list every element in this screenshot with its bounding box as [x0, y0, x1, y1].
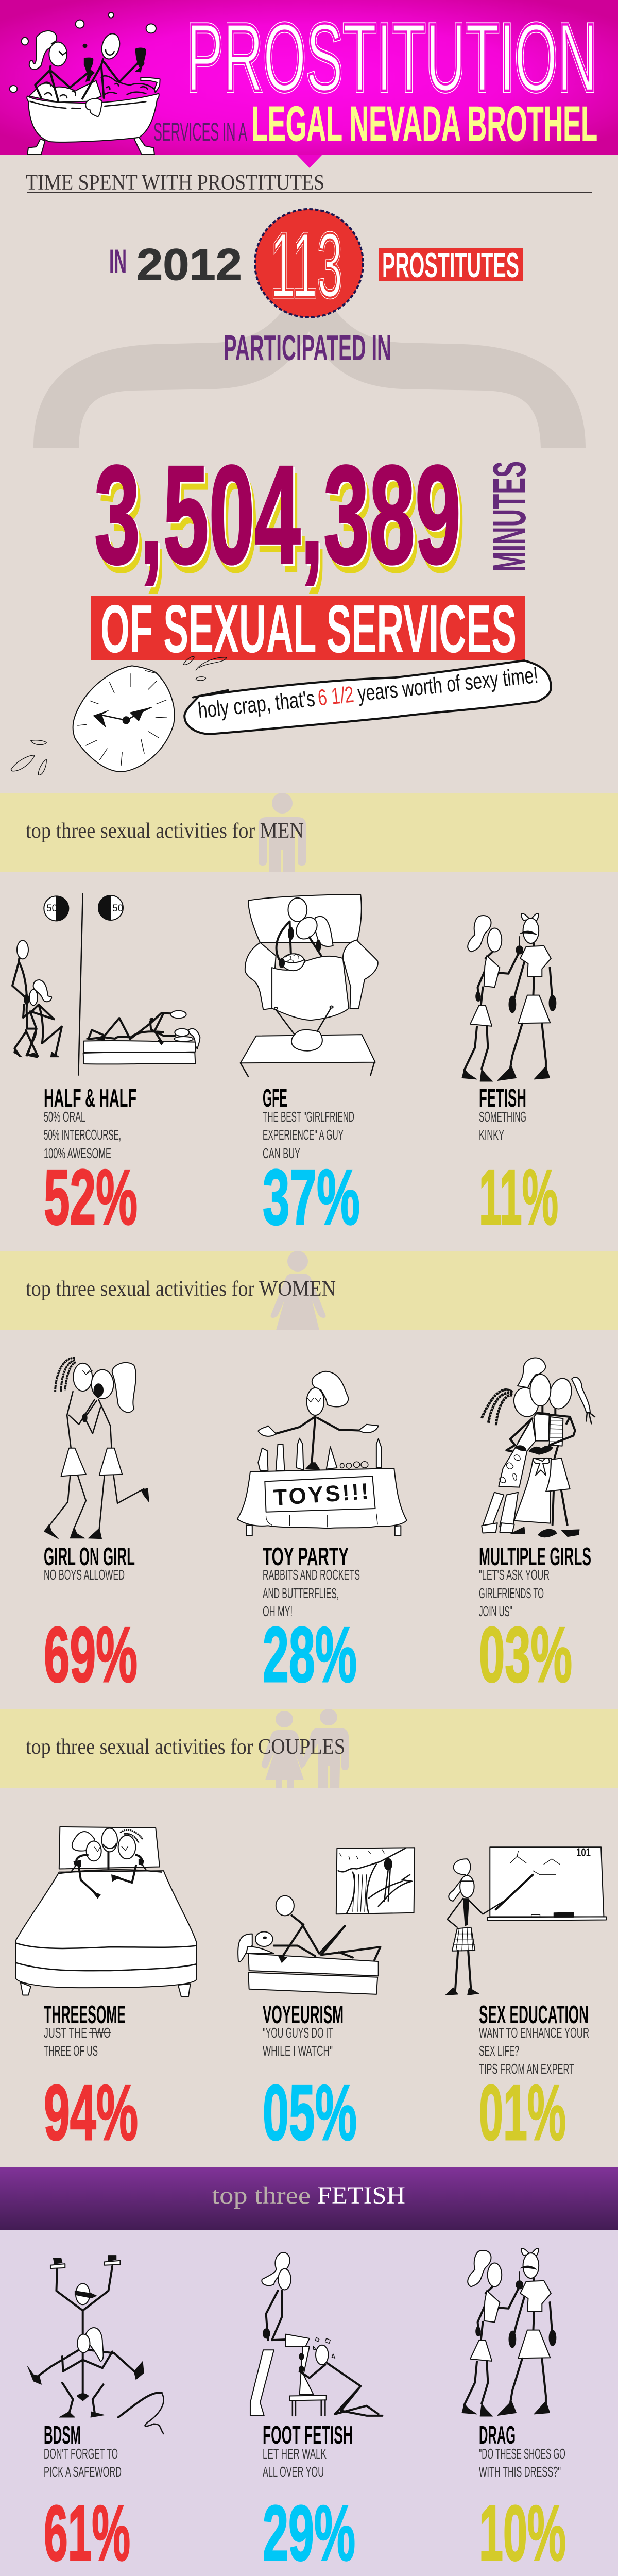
item: voyeurism	[238, 1848, 415, 2157]
item description: OH MY!	[263, 1603, 293, 1619]
percentage: 37%	[263, 1154, 360, 1241]
panel: top three for men	[12, 894, 558, 1241]
subtitle small: SERVICES IN A	[153, 117, 247, 146]
item title: TOY PARTY	[263, 1543, 349, 1571]
item: threesome	[16, 1827, 196, 2157]
percentage: 05%	[263, 2069, 357, 2157]
illustration: two girls kissing	[44, 1358, 149, 1539]
percentage: 29%	[263, 2489, 355, 2576]
band: fetish	[0, 2167, 618, 2230]
item description: CAN BUY	[263, 1145, 300, 1161]
badge: 113: 113	[270, 214, 342, 316]
illustration: teacher at whiteboard	[445, 1847, 606, 1995]
item: multiple girls	[479, 1358, 595, 1699]
item description: RABBITS AND ROCKETS	[263, 1567, 360, 1583]
heading: time spent	[26, 171, 592, 195]
item description: 50% ORAL	[44, 1109, 85, 1125]
big number: minutes	[94, 436, 465, 601]
decorative curly bracket	[33, 309, 586, 448]
item description: SOMETHING	[479, 1109, 526, 1125]
item: half and half	[12, 894, 200, 1241]
icon: man silhouette	[259, 793, 306, 872]
item description: 100% AWESOME	[44, 1145, 111, 1161]
item: drag: DRAG	[479, 2421, 516, 2449]
item description: LET HER WALK	[263, 2446, 327, 2462]
item description: "LET'S ASK YOUR	[479, 1567, 550, 1583]
item description	[263, 2446, 327, 2480]
item: bdsm: BDSM	[44, 2421, 81, 2449]
item description	[479, 1109, 526, 1143]
item description: NO BOYS ALLOWED	[44, 1567, 125, 1583]
item title: FETISH	[479, 1084, 526, 1112]
item: bdsm	[28, 2256, 164, 2576]
band title: top three sexual activities for MEN	[26, 819, 304, 843]
band: women	[0, 1251, 618, 1330]
percentage: 52%	[44, 1154, 138, 1241]
item description: KINKY	[479, 1127, 504, 1143]
item title: FOOT FETISH	[263, 2421, 353, 2449]
panel: header	[0, 0, 618, 168]
panel: top three for women	[44, 1358, 595, 1699]
item description	[263, 1567, 360, 1619]
callout: holy crap speech bubble: 6 1/2	[317, 682, 355, 710]
item: drag	[462, 2248, 566, 2576]
board text: 101: 101	[576, 1846, 591, 1859]
band: fetish: FETISH	[317, 2182, 405, 2209]
item title: VOYEURISM	[263, 2001, 344, 2029]
item description: 50% INTERCOURSE,	[44, 1127, 121, 1143]
item: girl on girl	[44, 1358, 149, 1699]
item title: HALF & HALF	[44, 1084, 136, 1112]
illustration: couple on armchair	[241, 894, 378, 1077]
item description	[479, 2025, 589, 2077]
item description: "YOU GUYS DO IT	[263, 2025, 333, 2041]
text: minutes: MINUTES	[484, 461, 536, 572]
item description: JUST THE TWO	[44, 2025, 111, 2041]
band: fetish: top three	[212, 2182, 311, 2209]
callout: holy crap speech bubble: holy crap, that's	[197, 686, 316, 723]
item description: PICK A SAFEWORD	[44, 2464, 122, 2480]
item description: THREE OF US	[44, 2043, 98, 2059]
big number: zero percent	[273, 2557, 616, 2576]
pointer under header	[297, 155, 322, 168]
percentage: 61%	[44, 2489, 130, 2576]
illustration: voyeur couple and picture	[238, 1848, 415, 1994]
item: toy party	[237, 1371, 407, 1699]
item description: THE BEST "GIRLFRIEND	[263, 1109, 354, 1125]
item title: THREESOME	[44, 2001, 126, 2029]
item description: WHILE I WATCH"	[263, 2043, 333, 2059]
callout: holy crap speech bubble	[184, 660, 551, 734]
item description: GIRLFRIENDS TO	[479, 1585, 544, 1601]
illustration: half and half	[12, 894, 200, 1075]
pie label: left 50: 50	[46, 903, 57, 914]
icon: melting clock	[11, 656, 227, 775]
illustration: three in a bed	[16, 1827, 196, 1997]
item description	[479, 1567, 550, 1619]
band title: top three sexual activities for COUPLES	[26, 1735, 345, 1759]
item description	[263, 1109, 354, 1161]
item description	[263, 2025, 333, 2059]
item: gfe	[241, 894, 378, 1241]
percentage: 69%	[44, 1611, 138, 1699]
panel: top three fetish	[0, 2167, 618, 2576]
illustration: toy party table	[237, 1371, 407, 1536]
item description: ALL OVER YOU	[263, 2464, 324, 2480]
item description: JOIN US"	[479, 1603, 512, 1619]
panel: zero percent conclusion	[0, 2557, 618, 2576]
item description	[479, 2446, 565, 2480]
illustration: couple in bathtub	[10, 12, 160, 155]
item: gfe: GFE	[263, 1084, 287, 1112]
label: prostitutes	[379, 246, 523, 285]
item description: EXPERIENCE" A GUY	[263, 1127, 344, 1143]
badge: 113	[255, 209, 363, 317]
item description: WITH THIS DRESS?"	[479, 2464, 561, 2480]
item description	[44, 2446, 122, 2480]
icon: woman silhouette	[271, 1251, 325, 1330]
item: sex education	[445, 1846, 606, 2157]
item description: SEX LIFE?	[479, 2043, 519, 2059]
item description: DON'T FORGET TO	[44, 2446, 118, 2462]
panel: top three for couples	[16, 1827, 606, 2157]
illustration: three girls	[482, 1358, 595, 1527]
text: participated in: PARTICIPATED IN	[224, 328, 391, 368]
badge: 113: 113	[270, 214, 342, 316]
illustration: bdsm figures	[28, 2256, 164, 2434]
percentage: 94%	[44, 2069, 138, 2157]
band: couples	[0, 1709, 618, 1788]
percentage: 28%	[263, 1611, 357, 1699]
callout: holy crap speech bubble: years worth of sexy time!	[356, 663, 539, 706]
illustration: foot fetish figures	[250, 2252, 382, 2416]
statement: in 2012: IN	[109, 242, 127, 280]
band: men	[0, 793, 618, 872]
item description: AND BUTTERFLIES,	[263, 1585, 339, 1601]
item: fetish	[462, 913, 558, 1241]
statement: in 2012: 2012	[136, 240, 242, 290]
item title: GIRL ON GIRL	[44, 1543, 135, 1571]
pie label: right 50: 50	[112, 903, 123, 914]
sign text: toys: TOYS!!!	[272, 1479, 369, 1511]
band title: top three sexual activities for WOMEN	[26, 1277, 336, 1301]
item description	[44, 1109, 121, 1161]
illustration: drag figures	[462, 2248, 556, 2416]
icon: couple silhouette	[262, 1709, 349, 1788]
item: foot fetish	[250, 2252, 382, 2576]
item description	[44, 2025, 111, 2059]
heading: time spent: TIME SPENT WITH PROSTITUTES	[26, 171, 324, 195]
illustration: drag figures	[462, 913, 556, 1081]
